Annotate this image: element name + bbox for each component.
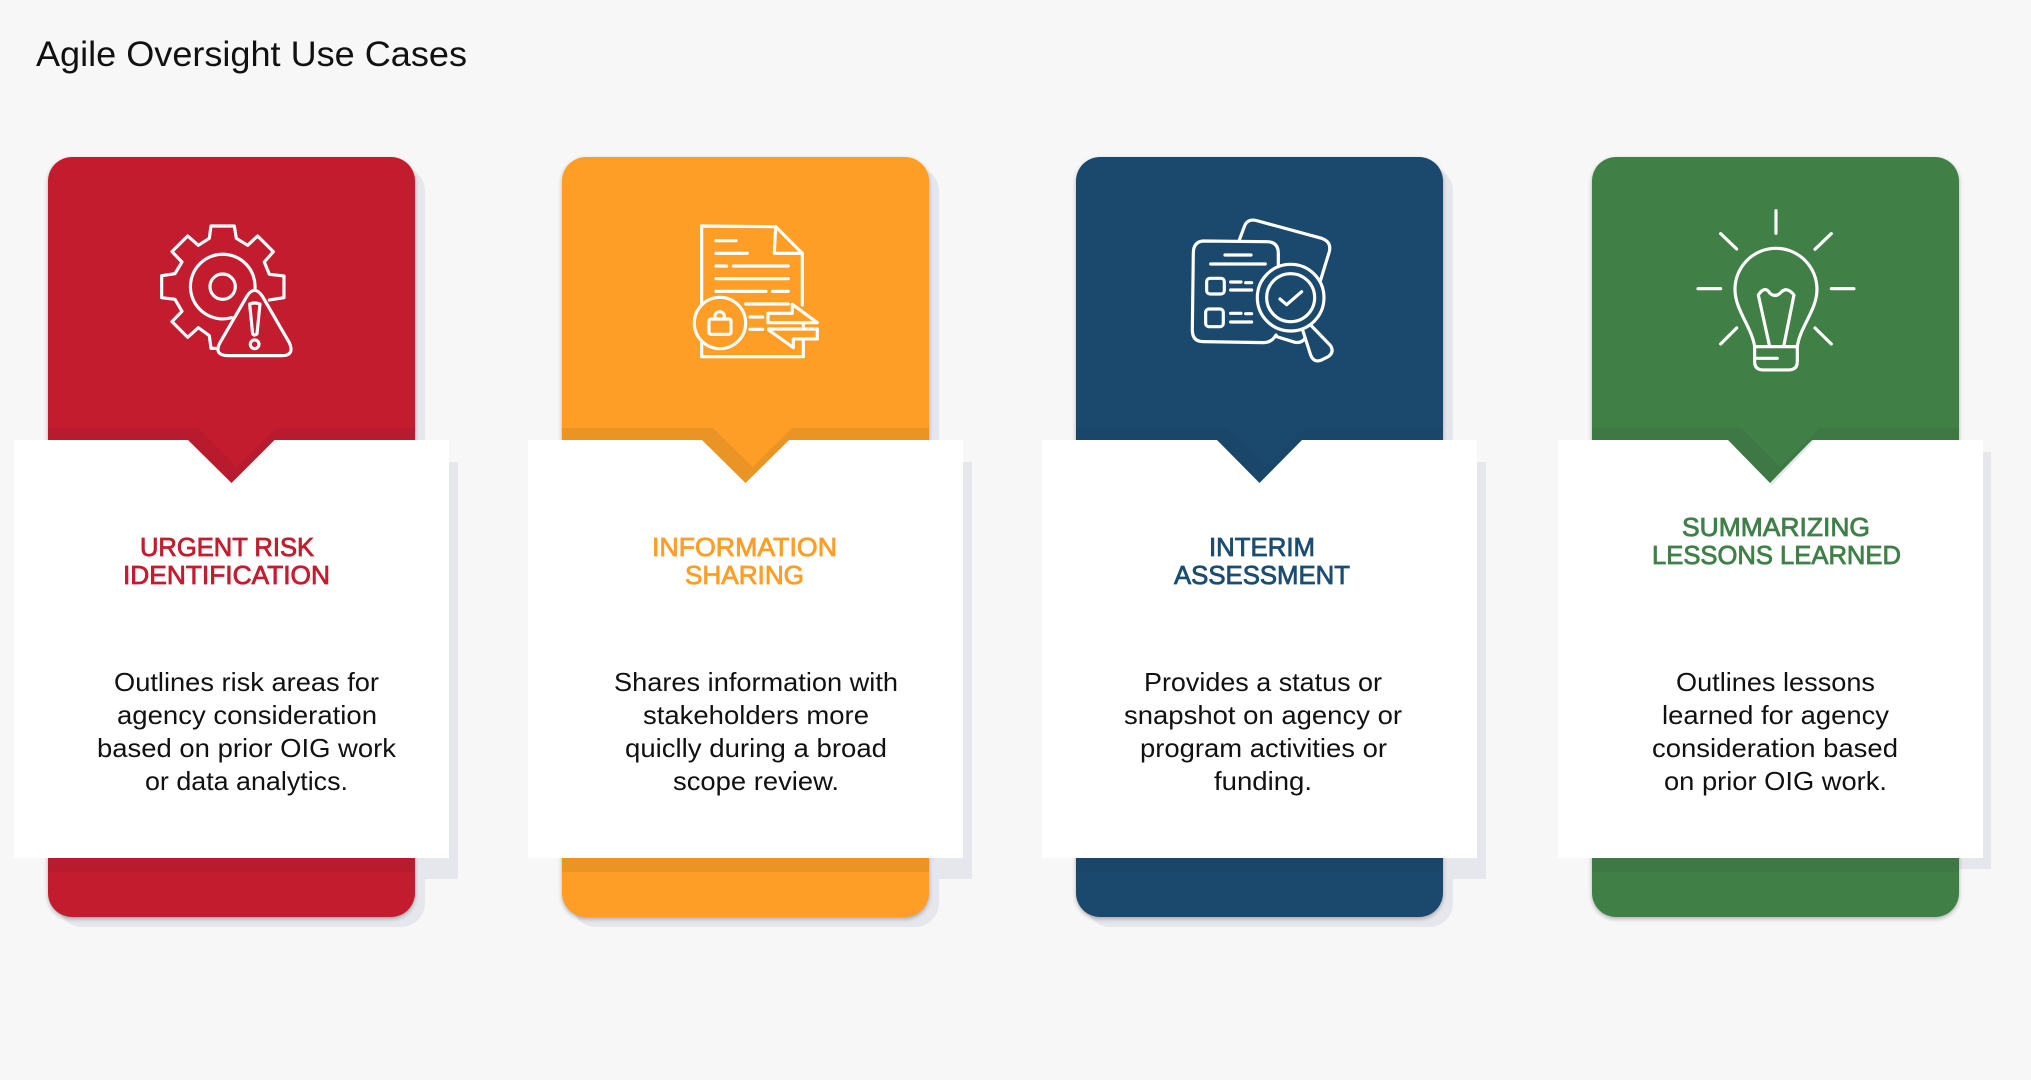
coloured card: [48, 157, 415, 917]
description: on prior OIG work.: [1664, 766, 1887, 796]
description: Shares information with: [614, 667, 898, 697]
heading: [652, 532, 837, 590]
panel: information sharing: [528, 157, 972, 927]
pointer shadow: [1728, 440, 1815, 485]
description: snapshot on agency or: [1124, 700, 1402, 730]
card edge shadow: [562, 159, 929, 919]
description: [1652, 667, 1898, 796]
description: [1124, 667, 1402, 796]
card top band: [1592, 428, 1959, 440]
coloured card: [1592, 157, 1959, 917]
card shadow: [58, 167, 425, 927]
heading: [123, 532, 330, 590]
panel: urgent risk identification: [14, 157, 458, 927]
heading: INFORMATION: [652, 532, 837, 562]
text panel shadow: [814, 462, 972, 879]
card bottom band: [48, 858, 415, 872]
description: agency consideration: [117, 700, 377, 730]
heading: SHARING: [685, 560, 804, 590]
card shadow: [1086, 167, 1453, 927]
card edge shadow: [48, 159, 415, 919]
text panel shadow: [300, 462, 458, 879]
description: funding.: [1214, 766, 1312, 796]
coloured card: [562, 157, 929, 917]
description: [97, 667, 397, 796]
card top band: [48, 428, 415, 440]
heading: SUMMARIZING: [1682, 512, 1870, 542]
card shadow: [572, 167, 939, 927]
heading: URGENT RISK: [140, 532, 315, 562]
heading: ASSESSMENT: [1174, 560, 1350, 590]
white text panel: [14, 440, 449, 858]
description: consideration based: [1652, 733, 1898, 763]
pointer: [188, 428, 277, 483]
description: based on prior OIG work: [97, 733, 397, 763]
description: quiclly during a broad: [625, 733, 887, 763]
description: Provides a status or: [1144, 667, 1382, 697]
card top band: [562, 428, 929, 440]
icon: gear with warning triangle: [162, 226, 291, 356]
text panel shadow: [1328, 462, 1486, 879]
heading: IDENTIFICATION: [123, 560, 330, 590]
panel: interim assessment: [1042, 157, 1486, 927]
card top band: [1076, 428, 1443, 440]
white text panel: [1558, 440, 1983, 858]
card edge shadow: [1592, 159, 1959, 919]
heading: LESSONS LEARNED: [1652, 540, 1901, 570]
white text panel: [1042, 440, 1477, 858]
heading: [1652, 512, 1901, 570]
white text panel: [528, 440, 963, 858]
heading: INTERIM: [1209, 532, 1315, 562]
card bottom band: [1592, 858, 1959, 872]
coloured card: [1076, 157, 1443, 917]
title: Agile Oversight Use Cases: [36, 35, 467, 74]
description: learned for agency: [1662, 700, 1889, 730]
description: scope review.: [673, 766, 839, 796]
pointer: [702, 428, 792, 483]
description: program activities or: [1140, 733, 1387, 763]
card bottom band: [1076, 858, 1443, 872]
card edge shadow: [1076, 159, 1443, 919]
pointer: [1217, 428, 1304, 483]
icon: locked document with exchange arrows: [694, 226, 817, 357]
pointer: [1728, 428, 1820, 483]
icon: checklist with magnifier: [1192, 220, 1332, 361]
card bottom band: [562, 858, 929, 872]
description: or data analytics.: [145, 766, 348, 796]
text panel shadow: [1850, 452, 1991, 869]
heading: [1174, 532, 1350, 590]
description: Outlines lessons: [1676, 667, 1875, 697]
icon: light bulb: [1698, 211, 1854, 370]
description: Outlines risk areas for: [114, 667, 379, 697]
description: [614, 667, 898, 796]
panel: summarizing lessons learned: [1558, 157, 1991, 919]
description: stakeholders more: [643, 700, 869, 730]
